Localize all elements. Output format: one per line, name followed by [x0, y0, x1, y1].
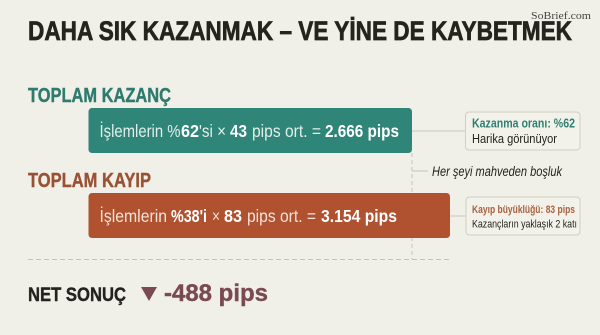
bar: total win: 62 [181, 121, 199, 141]
label: gap: Her şeyi mahveden boşluk [432, 164, 563, 179]
bar: total loss: × [212, 206, 220, 226]
bar: total win: 43 [230, 121, 247, 141]
callout: win rate [466, 112, 580, 150]
bar: total win [88, 108, 412, 153]
callout: loss size [466, 197, 580, 235]
bar: total win: 2.666 pips [325, 121, 399, 141]
icon: down triangle [141, 287, 157, 301]
bar: total win: pips ort. = [252, 121, 321, 141]
connector: win callout [412, 130, 465, 132]
bar: total loss: 3.154 pips [321, 206, 397, 226]
heading: total win: TOPLAM KAZANÇ [28, 85, 171, 107]
bar: total loss: %38'i [171, 206, 207, 226]
connector: loss callout [450, 215, 466, 217]
bar: total win: 'si × [199, 121, 226, 141]
callout: loss size: Kazançların yaklaşık 2 katı [472, 218, 577, 230]
callout: win rate: Kazanma oranı: %62 [472, 116, 575, 130]
callout: win rate: Harika görünüyor [472, 131, 558, 146]
bar: total loss: İşlemlerin [100, 206, 167, 226]
connector: gap label [412, 170, 428, 172]
bar: total loss: pips ort. = [247, 206, 316, 226]
value: net result: -488 pips [164, 280, 268, 307]
bar: total loss: 83 [224, 206, 242, 226]
bar: total win: İşlemlerin % [100, 121, 180, 141]
bar: total loss [88, 193, 450, 238]
heading: total loss: TOPLAM KAYIP [28, 170, 151, 192]
watermark: SoBrief.com [531, 11, 591, 22]
label: net result: NET SONUÇ [28, 284, 126, 306]
